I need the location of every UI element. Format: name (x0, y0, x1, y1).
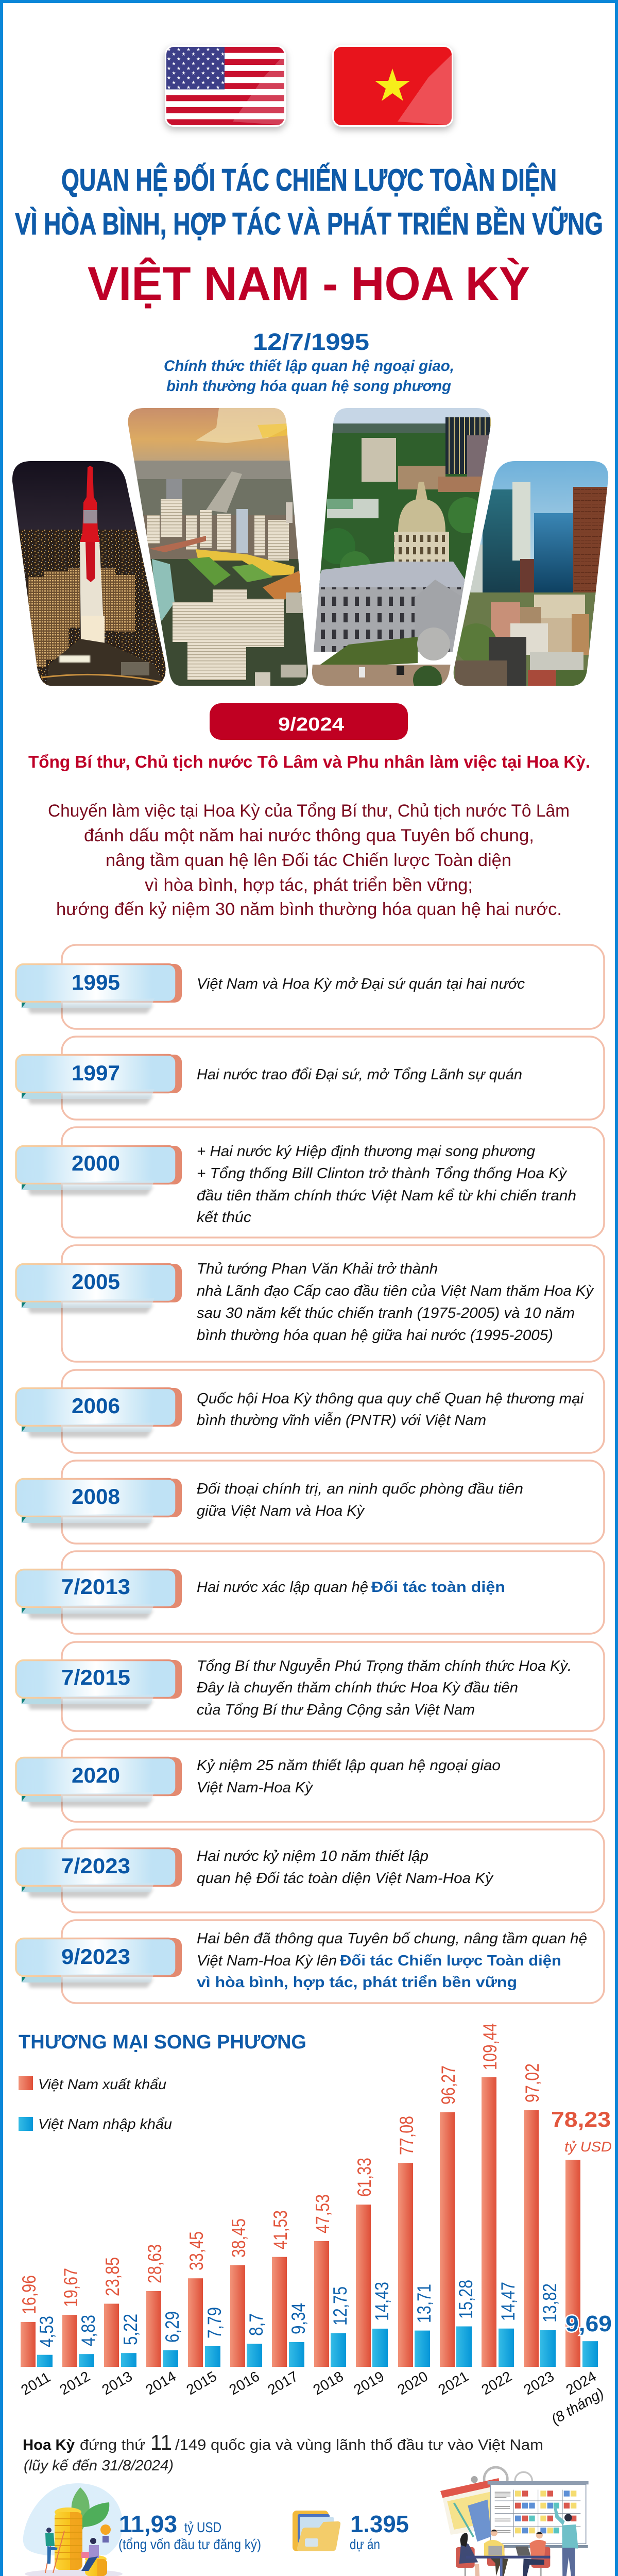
timeline item: 2006: Quốc hội Hoa Kỳ thông qua quy chế Quan hệ thương mại (197, 1391, 585, 1407)
timeline item: 7/2013: Hai nước xác lập quan hệ (197, 1579, 368, 1596)
chart values: export: tỷ USD (564, 2139, 612, 2155)
timeline item: 2005: bình thường hóa quan hệ giữa hai nước (1995-2005) (197, 1327, 553, 1344)
timeline item: 2005: sau 30 năm kết thúc chiến tranh (1975-2005) và 10 năm (197, 1305, 575, 1321)
timeline item: 2008 (16, 1461, 604, 1544)
chart axis: years: 2021 (436, 2368, 471, 2398)
chart values: import: 8,7 (246, 2313, 267, 2336)
stat: registered capital (118, 2511, 261, 2552)
title (15, 163, 603, 310)
timeline item: 7/2015: Tổng Bí thư Nguyễn Phú Trọng thăm chính thức Hoa Kỳ. (197, 1657, 572, 1674)
title: VIỆT NAM - HOA KỲ (88, 257, 530, 310)
timeline item: 1997: 1997 (72, 1061, 120, 1085)
timeline item: 7/2015 (16, 1642, 604, 1731)
chart values: export: 61,33 (354, 2158, 375, 2197)
stat: number of projects: 1.395 (350, 2511, 409, 2537)
chart axis: years: 2024 (563, 2368, 599, 2398)
timeline item: 2000: 2000 (72, 1151, 120, 1175)
photo: Landmark tower at night (12, 461, 166, 686)
chart values: export: 96,27 (438, 2065, 459, 2105)
chart values: import: 6,29 (162, 2311, 183, 2343)
timeline item: 1995 (16, 945, 604, 1029)
timeline item: 2006: bình thường vĩnh viễn (PNTR) với Việt Nam (197, 1412, 486, 1429)
timeline item: 2005 (16, 1245, 604, 1362)
timeline item: 2000: + Tổng thống Bill Clinton trở thành Tổng thống Hoa Kỳ (197, 1165, 568, 1182)
chart values: export: 28,63 (144, 2244, 165, 2283)
chart values: import: 7,79 (204, 2307, 225, 2338)
chart axis: years: 2023 (521, 2368, 557, 2398)
chart axis: years: 2018 (311, 2368, 346, 2398)
timeline item: 9/2023: Đối tác Chiến lược Toàn diện (340, 1953, 561, 1969)
stat: number of projects (350, 2511, 409, 2552)
stat: registered capital: 11,93 (119, 2511, 177, 2537)
bar chart: export and import bars (21, 2077, 598, 2367)
chart values: import: 4,53 (36, 2316, 57, 2347)
chart values: export: 41,53 (270, 2210, 291, 2249)
intro paragraph: Chuyến làm việc tại Hoa Kỳ của Tổng Bí thư, Chủ tịch nước Tô Lâm (48, 801, 570, 821)
timeline item: 2020: Việt Nam-Hoa Kỳ (197, 1780, 313, 1796)
intro paragraph: nâng tầm quan hệ lên Đối tác Chiến lược Toàn diện (106, 851, 511, 870)
timeline item: 7/2023: Hai nước kỷ niệm 10 năm thiết lập (197, 1848, 428, 1865)
timeline item: 7/2023 (16, 1829, 604, 1912)
chart axis: years: (8 tháng) (548, 2385, 607, 2428)
chart values: import: 13,82 (539, 2283, 560, 2323)
timeline item: 1997 (16, 1037, 604, 1120)
timeline item: 9/2023: 9/2023 (61, 1944, 130, 1969)
chart values: import: 15,28 (455, 2280, 476, 2319)
icon: US flag (165, 45, 286, 127)
chart legend (19, 2076, 172, 2132)
timeline item: 2005: 2005 (72, 1269, 120, 1294)
timeline item: 9/2023: vì hòa bình, hợp tác, phát triển bền vững (197, 1974, 517, 1991)
timeline item: 9/2023: Việt Nam-Hoa Kỳ lên (197, 1953, 337, 1969)
photo: Vietnamese city skyline at sunset (124, 406, 312, 688)
chart values: export: 47,53 (312, 2194, 333, 2233)
chart values: import: 9,69 (565, 2311, 612, 2336)
timeline item: 2000: đầu tiên thăm chính thức Việt Nam kể từ khi chiến tranh (197, 1188, 576, 1204)
heading: bilateral trade: THƯƠNG MẠI SONG PHƯƠNG (19, 2031, 306, 2053)
chart axis: years: 2017 (265, 2368, 301, 2398)
timeline item: 7/2013 (16, 1551, 604, 1634)
chart axis: years: 2013 (99, 2368, 135, 2398)
timeline item: 2006: 2006 (72, 1394, 120, 1418)
chart legend: Việt Nam xuất khẩu (38, 2076, 166, 2092)
timeline item: 2020 (16, 1739, 604, 1822)
chart axis: years: 2014 (143, 2368, 179, 2398)
icon: Vietnam flag (332, 45, 453, 127)
timeline item: 2000: kết thúc (197, 1209, 252, 1226)
investment statement: (lũy kế đến 31/8/2024) (24, 2458, 174, 2474)
timeline item: 9/2023 (16, 1920, 604, 2003)
timeline item: 1995: 1995 (72, 970, 120, 994)
timeline item: 2020: Kỷ niệm 25 năm thiết lập quan hệ ngoại giao (197, 1757, 501, 1774)
chart axis: years (18, 2368, 607, 2428)
timeline item: 2000 (16, 1127, 604, 1238)
timeline item: 7/2015: của Tổng Bí thư Đảng Cộng sản Việt Nam (197, 1702, 475, 1718)
chart values: import: 13,71 (414, 2284, 435, 2323)
chart values: import: 9,34 (288, 2303, 309, 2334)
chart legend: Việt Nam nhập khẩu (38, 2116, 172, 2132)
chart values: import: 14,47 (497, 2282, 519, 2321)
intro paragraph: đánh dấu một năm hai nước thông qua Tuyên bố chung, (84, 826, 534, 845)
date badge: 9/2024 (210, 703, 408, 740)
timeline item: 2005: nhà Lãnh đạo Cấp cao đầu tiên của Việt Nam thăm Hoa Kỳ (197, 1283, 594, 1299)
chart values: export (19, 2023, 612, 2314)
date badge: 9/2024: 9/2024 (278, 714, 344, 735)
intro paragraph: hướng đến kỷ niệm 30 năm bình thường hóa quan hệ hai nước. (56, 900, 562, 919)
icon: yellow folder (293, 2511, 340, 2551)
timeline item: 7/2023: 7/2023 (61, 1854, 130, 1878)
stat: registered capital: (tổng vốn đầu tư đăng ký) (118, 2536, 261, 2552)
chart axis: years: 2011 (18, 2369, 53, 2398)
icon: coin stack with people (23, 2483, 123, 2576)
timeline item: 7/2013: 7/2013 (61, 1574, 130, 1599)
timeline item: 9/2023: Hai bên đã thông qua Tuyên bố chung, nâng tầm quan hệ (197, 1930, 587, 1947)
chart values: import: 12,75 (330, 2286, 351, 2326)
date heading: 12/7/1995 (253, 329, 369, 355)
photo: Los Angeles skyline (448, 459, 613, 690)
chart values: import: 14,43 (371, 2282, 392, 2321)
chart values: import: 5,22 (120, 2314, 141, 2345)
chart values: export: 23,85 (102, 2257, 123, 2296)
timeline item: 2006 (16, 1370, 604, 1453)
timeline item: 1995: Việt Nam và Hoa Kỳ mở Đại sứ quán tại hai nước (197, 976, 525, 992)
investment statement: đứng thứ (80, 2437, 145, 2453)
intro paragraph: vì hòa bình, hợp tác, phát triển bền vững; (145, 875, 473, 895)
subheading: Tổng Bí thư, Chủ tịch nước Tô Lâm và Phu nhân làm việc tại Hoa Kỳ. (28, 752, 590, 771)
timeline item: 7/2015: Đây là chuyến thăm chính thức Hoa Kỳ đầu tiên (197, 1680, 518, 1696)
timeline item: 2008: Đối thoại chính trị, an ninh quốc phòng đầu tiên (197, 1481, 523, 1497)
chart axis: years: 2019 (351, 2368, 387, 2398)
investment statement (23, 2430, 543, 2474)
chart values: export: 16,96 (19, 2275, 40, 2314)
timeline item: 2008: giữa Việt Nam và Hoa Kỳ (197, 1503, 365, 1519)
investment statement: 11 (150, 2430, 172, 2454)
chart axis: years: 2022 (479, 2368, 514, 2398)
chart axis: years: 2012 (57, 2368, 93, 2398)
timeline item: 2008: 2008 (72, 1484, 120, 1509)
stat: number of projects: dự án (350, 2536, 380, 2552)
chart values: export: 33,45 (186, 2231, 207, 2270)
illustration: team planning at a board (440, 2467, 589, 2576)
investment statement: Hoa Kỳ (23, 2437, 75, 2453)
chart values: export: 19,67 (60, 2268, 81, 2307)
date heading: Chính thức thiết lập quan hệ ngoại giao, (164, 358, 454, 375)
chart values: export: 77,08 (396, 2116, 417, 2155)
investment statement: /149 quốc gia và vùng lãnh thổ đầu tư vào Việt Nam (175, 2437, 543, 2453)
chart values: export: 109,44 (479, 2023, 501, 2070)
chart values: export: 78,23 (551, 2107, 611, 2131)
chart values: import: 4,83 (78, 2315, 99, 2346)
stat: registered capital: tỷ USD (184, 2519, 221, 2535)
chart values: import (36, 2280, 612, 2347)
date heading: bình thường hóa quan hệ song phương (166, 378, 451, 395)
chart axis: years: 2015 (184, 2368, 219, 2398)
timeline item: 7/2023: quan hệ Đối tác toàn diện Việt Nam-Hoa Kỳ (197, 1870, 494, 1887)
date heading (164, 329, 454, 395)
timeline item: 7/2013: Đối tác toàn diện (371, 1579, 505, 1596)
chart axis: years: 2016 (227, 2368, 262, 2398)
timeline item: 2005: Thủ tướng Phan Văn Khải trở thành (197, 1261, 438, 1277)
timeline item: 2000: + Hai nước ký Hiệp định thương mại song phương (197, 1143, 535, 1160)
intro paragraph (48, 801, 570, 919)
timeline item: 2020: 2020 (72, 1763, 120, 1787)
chart values: export: 38,45 (228, 2218, 249, 2258)
chart values: export: 97,02 (522, 2063, 543, 2103)
photo: US state capitol (309, 406, 494, 694)
timeline item: 7/2015: 7/2015 (61, 1665, 130, 1689)
timeline item: 1997: Hai nước trao đổi Đại sứ, mở Tổng Lãnh sự quán (197, 1066, 522, 1083)
chart axis: years: 2020 (395, 2368, 431, 2398)
